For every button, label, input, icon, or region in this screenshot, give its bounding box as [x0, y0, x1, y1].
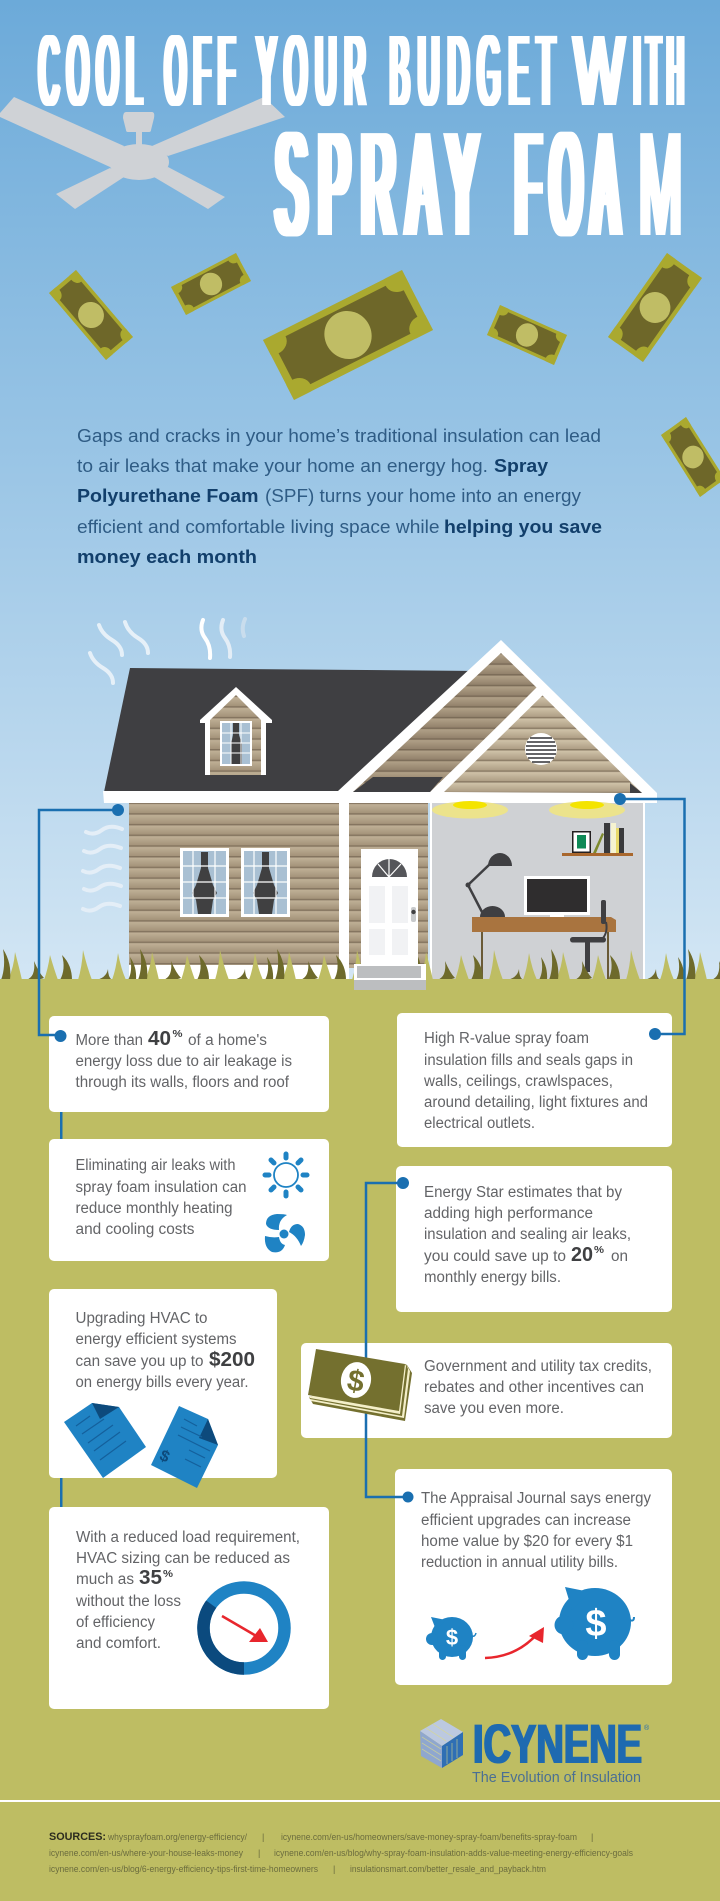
logo: Icynene: ®	[644, 1724, 650, 1732]
main roof	[104, 668, 480, 795]
attic vent	[525, 733, 557, 765]
intro text: efficient and comfortable living space while	[77, 516, 440, 537]
logo: Icynene: The Evolution of Insulation	[472, 1769, 641, 1786]
footer divider	[0, 1800, 720, 1802]
intro text	[77, 425, 602, 567]
intro text: to air leaks that make your home an energy hog.	[77, 455, 488, 476]
sources: |	[258, 1848, 260, 1858]
donut gauge	[203, 1588, 284, 1668]
ground	[0, 979, 720, 1901]
card: 40 percent: More than	[76, 1032, 143, 1049]
card: eliminating air leaks: spray foam insulation can	[76, 1179, 246, 1196]
logo: Icynene	[420, 1712, 650, 1786]
logo cube	[420, 1719, 463, 1768]
gable white trim	[103, 640, 657, 803]
card: 40 percent: %	[172, 1029, 183, 1040]
card: HVAC sizing: of efficiency	[76, 1614, 155, 1631]
card: Appraisal Journal: The Appraisal Journal says energy	[421, 1490, 651, 1507]
card: 40 percent: energy loss due to air leakage is	[76, 1053, 292, 1070]
window left	[180, 848, 229, 917]
card: tax credits: save you even more.	[424, 1400, 564, 1417]
card: upgrading HVAC	[49, 1289, 277, 1478]
icon: wall air leak wisps	[83, 827, 122, 911]
card: Energy Star: adding high performance	[424, 1205, 593, 1222]
card: upgrading HVAC: on energy bills every year.	[76, 1374, 248, 1391]
icon: stack of cash	[308, 1349, 412, 1421]
card: Energy Star	[396, 1166, 672, 1312]
intro text: money each month	[77, 546, 257, 567]
card: Energy Star: %	[594, 1245, 604, 1256]
intro text: helping you save	[444, 516, 602, 537]
card: 40 percent	[49, 1016, 329, 1112]
title: W	[574, 15, 624, 127]
roof valley trim	[431, 684, 546, 793]
title: YOUR	[257, 15, 374, 127]
card: eliminating air leaks: and cooling costs	[76, 1221, 195, 1238]
sources: |	[262, 1832, 264, 1842]
title: OFF	[165, 15, 243, 127]
card: R-value: around detailing, light fixtures and	[424, 1094, 648, 1111]
arrow: red pointer	[222, 1616, 268, 1642]
card: upgrading HVAC: Upgrading HVAC to	[76, 1310, 208, 1327]
sources: insulationsmart.com/better_resale_and_payback.htm	[350, 1864, 546, 1874]
icon: stack of cash: $	[345, 1364, 367, 1399]
card: Appraisal Journal	[395, 1469, 672, 1685]
card: R-value: electrical outlets.	[424, 1115, 535, 1132]
sources: |	[333, 1864, 335, 1874]
house illustration	[103, 640, 657, 980]
sources: icynene.com/en-us/blog/6-energy-efficiency-tips-first-time-homeowners	[49, 1864, 318, 1874]
icon: small piggy bank: $	[446, 1625, 458, 1650]
connector: card 1 to card 2	[60, 1112, 62, 1139]
sources: whysprayfoam.org/energy-efficiency/	[107, 1832, 247, 1842]
card: eliminating air leaks	[49, 1139, 329, 1261]
dormer	[200, 687, 272, 775]
card: R-value: walls, ceilings, crawlspaces,	[423, 1073, 613, 1090]
card: tax credits	[301, 1343, 672, 1438]
computer on desk	[523, 876, 592, 922]
front steps	[354, 964, 426, 990]
door section siding	[349, 803, 428, 968]
rear gable siding	[353, 653, 537, 792]
connector: right column savings	[366, 1177, 414, 1502]
grass	[0, 947, 720, 980]
card: HVAC sizing: HVAC sizing can be reduced as	[76, 1550, 290, 1567]
icon: large piggy bank	[554, 1587, 634, 1660]
foundation	[129, 965, 349, 979]
intro text: (SPF) turns your home into an energy	[265, 485, 582, 506]
card: HVAC sizing: without the loss	[75, 1593, 181, 1610]
card: HVAC sizing: and comfort.	[76, 1635, 161, 1652]
icon: ceiling fan	[0, 97, 285, 209]
card: 40 percent: of a home's	[188, 1032, 267, 1049]
sources: SOURCES:	[49, 1831, 106, 1843]
front door	[361, 849, 418, 966]
card: 40 percent: 40	[148, 1028, 171, 1050]
card: R-value: insulation fills and seals gaps in	[424, 1052, 633, 1069]
icon: falling money bills	[45, 248, 720, 501]
title: COOL	[39, 15, 150, 127]
icon: fan	[265, 1214, 305, 1252]
card: R-value	[397, 1013, 672, 1147]
card: HVAC sizing: 35	[139, 1567, 162, 1589]
desk lamp	[466, 853, 512, 917]
card: 40 percent: through its walls, floors and roof	[76, 1074, 290, 1091]
card: Appraisal Journal: home value by $20 for every $1	[421, 1533, 633, 1550]
intro text: Gaps and cracks in your home’s traditional insulation can lead	[77, 425, 601, 446]
downspout column	[339, 802, 349, 978]
intro text: Spray	[494, 455, 549, 476]
shelf with books and picture	[562, 823, 633, 856]
icon: roof heat wisps	[90, 619, 245, 683]
title	[39, 15, 690, 267]
card: upgrading HVAC: $200	[209, 1349, 255, 1371]
sources: |	[591, 1832, 593, 1842]
front gable siding	[442, 695, 642, 793]
card: eliminating air leaks: Eliminating air leaks with	[76, 1157, 236, 1174]
left wall siding	[129, 802, 339, 965]
intro text: Polyurethane Foam	[77, 485, 258, 506]
card: HVAC sizing: much as	[76, 1571, 134, 1588]
icon: sun	[265, 1154, 307, 1196]
office chair	[570, 900, 607, 972]
connector: left wall to 40 percent card	[39, 804, 124, 1042]
sources: icynene.com/en-us/where-your-house-leaks-money	[49, 1848, 243, 1858]
connector: card 3 to card 4	[60, 1478, 62, 1507]
sky background	[0, 0, 720, 985]
card: HVAC sizing	[49, 1507, 329, 1709]
icon: large piggy bank: $	[585, 1603, 607, 1645]
desk	[472, 917, 616, 979]
card: Energy Star: monthly energy bills.	[424, 1269, 561, 1286]
card: Energy Star: insulation and sealing air leaks,	[424, 1226, 631, 1243]
arrow: growth	[485, 1627, 544, 1658]
card: HVAC sizing: With a reduced load requirement,	[76, 1529, 300, 1546]
card: upgrading HVAC: energy efficient systems	[76, 1331, 237, 1348]
sources: icynene.com/en-us/blog/why-spray-foam-insulation-adds-value-meeting-energy-efficiency-goals	[274, 1848, 633, 1858]
card: HVAC sizing: %	[163, 1569, 173, 1580]
card: Appraisal Journal: reduction in annual utility bills.	[421, 1554, 618, 1571]
interior room	[430, 800, 645, 980]
window right	[241, 848, 290, 917]
ceiling lights	[432, 801, 625, 818]
connector: attic to R-value card	[614, 793, 684, 1040]
card: upgrading HVAC: can save you up to	[76, 1353, 204, 1370]
card: eliminating air leaks: reduce monthly heating	[76, 1200, 232, 1217]
card: Energy Star: Energy Star estimates that by	[424, 1184, 622, 1201]
sources: icynene.com/en-us/homeowners/save-money-spray-foam/benefits-spray-foam	[281, 1832, 577, 1842]
logo: Icynene: ICYNENE	[473, 1712, 642, 1775]
icon: energy bill documents: $	[157, 1447, 172, 1466]
card: Energy Star: you could save up to	[424, 1248, 566, 1265]
card: R-value: High R-value spray foam	[424, 1030, 589, 1047]
icon: energy bill documents	[64, 1403, 218, 1488]
card: tax credits: Government and utility tax credits,	[424, 1358, 652, 1375]
card: Appraisal Journal: efficient upgrades can increase	[421, 1512, 631, 1529]
icon: small piggy bank	[426, 1617, 476, 1660]
card: Energy Star: 20	[571, 1244, 593, 1266]
card: Energy Star: on	[611, 1248, 628, 1265]
sources	[49, 1831, 633, 1874]
card: tax credits: rebates and other incentives can	[424, 1379, 644, 1396]
